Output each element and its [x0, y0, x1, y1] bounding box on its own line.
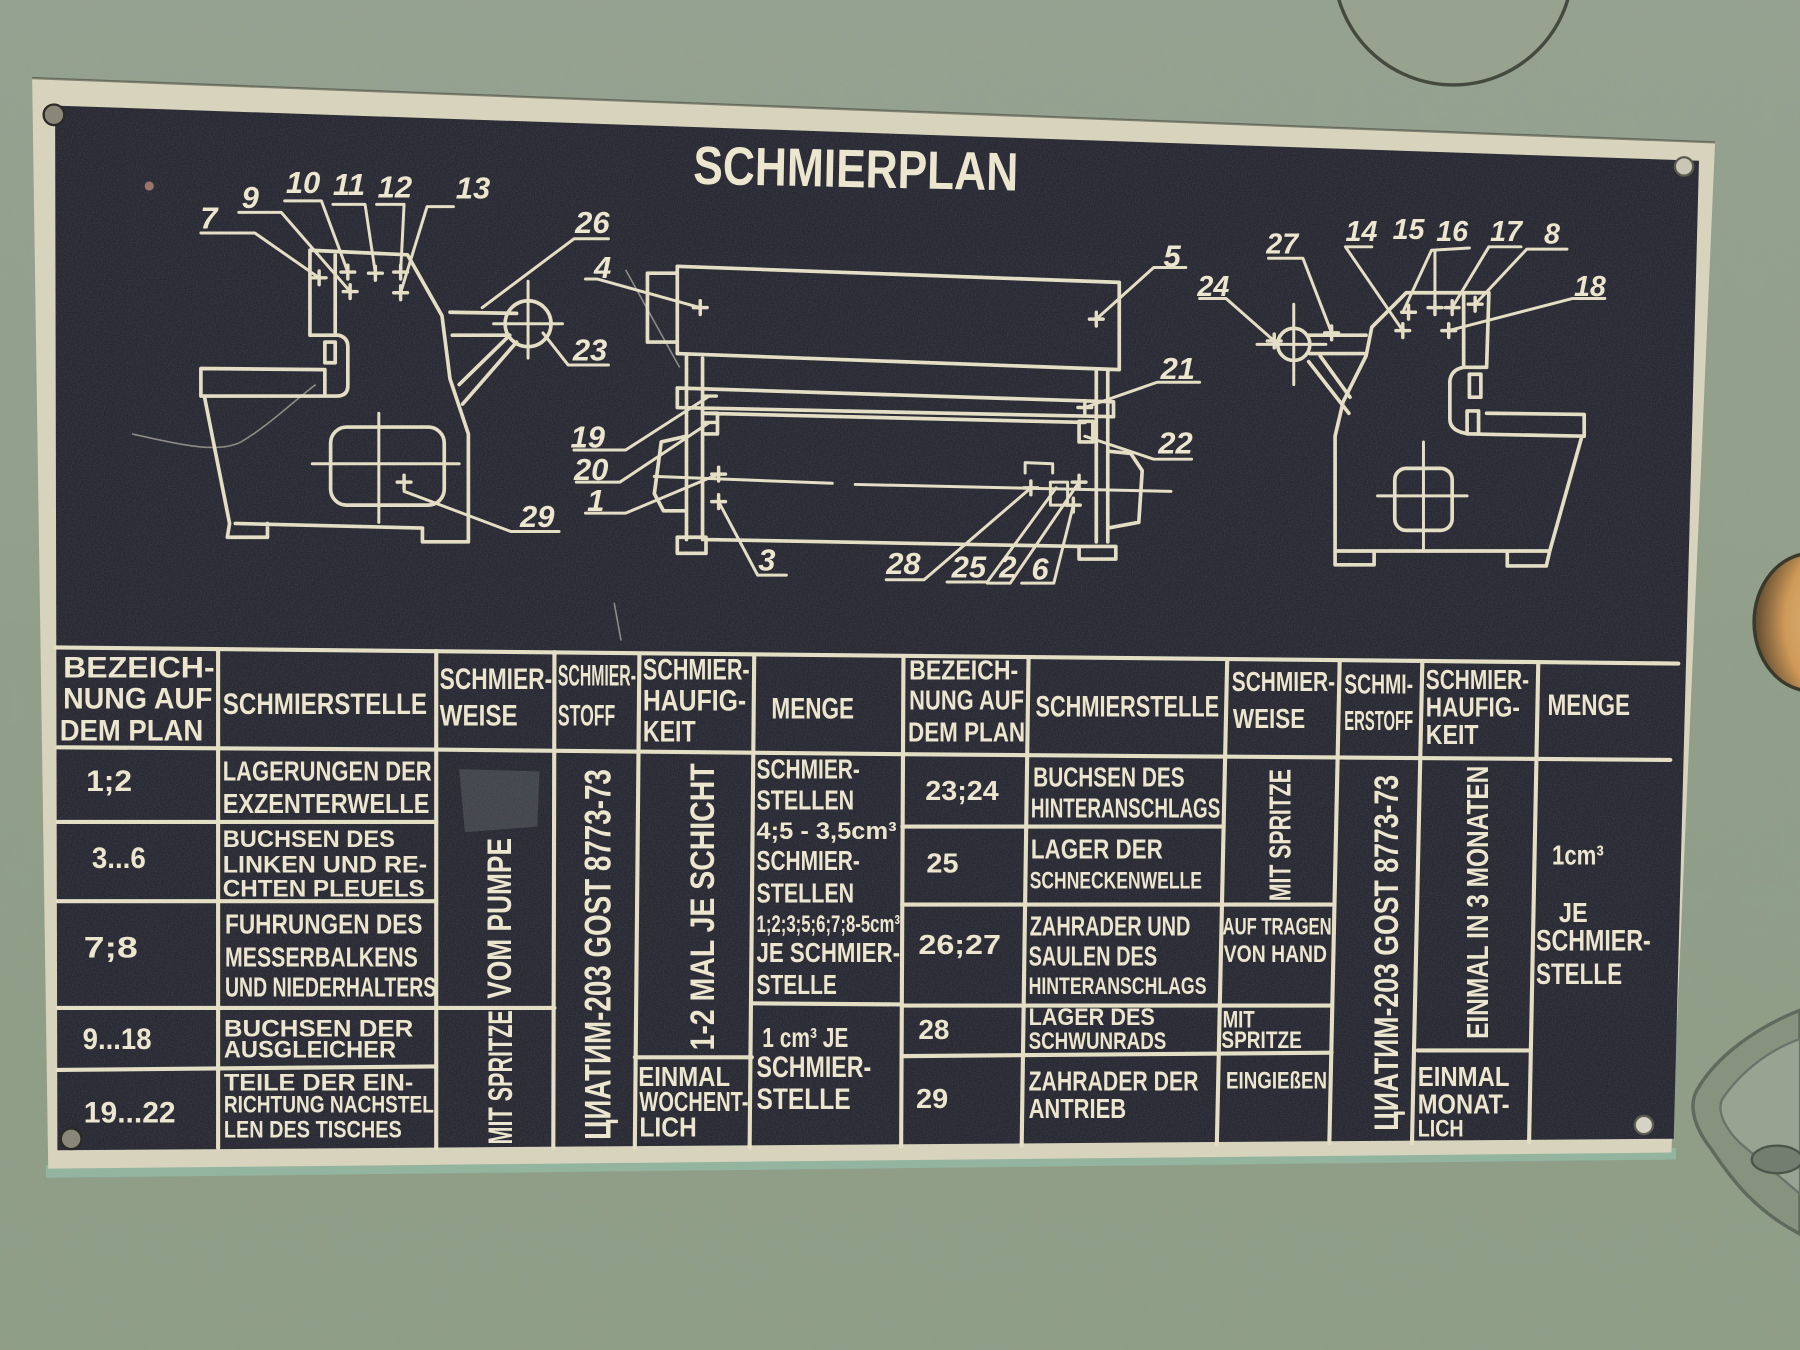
- table body, right half: EINMAL IN 3 MONATEN: [1460, 766, 1495, 1039]
- table header, left half: STOFF: [558, 700, 615, 733]
- table body, left half: JE SCHMIER-: [757, 937, 900, 968]
- panel: dark plate face: [46, 98, 1710, 1159]
- table header, left half: HAUFIG-: [643, 685, 746, 718]
- table body, left half: UND NIEDERHALTERS: [225, 971, 436, 1002]
- table header, right half: SCHMIER-: [1232, 666, 1335, 697]
- table body, left half: 4;5 - 3,5cm³: [757, 818, 897, 845]
- table body, left half: LINKEN UND RE-: [223, 851, 427, 878]
- table body, right half: [916, 761, 1651, 1142]
- table body, left half: 1;2;3;5;6;7;8-5cm³: [757, 911, 900, 938]
- table body, left half: LAGERUNGEN DER: [223, 756, 432, 787]
- point numbers, left view: 13: [456, 171, 490, 206]
- table header, right half: SCHMIERSTELLE: [1035, 690, 1219, 723]
- mint paint edge under plate: [46, 1148, 1676, 1178]
- lubrication leaders, left view: [201, 201, 608, 532]
- diagram: right side view of machine: [1196, 214, 1606, 566]
- point numbers, right view: [1196, 214, 1606, 303]
- table body, right half: 23;24: [925, 775, 999, 806]
- table body, right half: HINTERANSCHLAGS: [1031, 792, 1220, 823]
- table body, left half: 3...6: [92, 842, 146, 875]
- table header, right half: BEZEICH-: [909, 655, 1018, 686]
- table header, right half: DEM PLAN: [908, 717, 1025, 748]
- point numbers, front view: 21: [1160, 351, 1195, 386]
- table body, right half: 29: [916, 1083, 948, 1114]
- table body, left half: MESSERBALKENS: [225, 942, 418, 973]
- table body, right half: ЦИАТИМ-203 GOST 8773-73: [1368, 775, 1406, 1131]
- table body, right half: LICH: [1418, 1115, 1464, 1142]
- table body, left half: STELLE: [757, 969, 837, 1000]
- table body, right half: 25: [926, 847, 959, 878]
- table body, left half: CHTEN PLEUELS: [223, 876, 425, 903]
- table body, right half: SCHWUNRADS: [1029, 1028, 1166, 1055]
- table body, right half: BUCHSEN DES: [1033, 761, 1185, 792]
- table header, left half: SCHMIER-: [643, 654, 750, 687]
- table header, left half: KEIT: [643, 716, 696, 749]
- table header, left half: [60, 651, 854, 749]
- title: SCHMIERPLAN: [693, 136, 1019, 203]
- panel: lubrication table grid: [55, 647, 1678, 1148]
- point numbers, front view: [571, 238, 1195, 587]
- point numbers, right view: 24: [1196, 271, 1229, 303]
- table body, left half: 1;2: [86, 765, 132, 798]
- point numbers, left view: 23: [572, 332, 607, 367]
- table body, right half: MONAT-: [1418, 1089, 1510, 1120]
- table header, right half: WEISE: [1233, 703, 1305, 734]
- table body, right half: LAGER DER: [1031, 834, 1163, 865]
- table body, right half: ZAHRADER DER: [1029, 1066, 1199, 1097]
- table body, right half: AUF TRAGEN: [1223, 913, 1332, 940]
- table body, right half: 28: [918, 1014, 949, 1045]
- point numbers, right view: 17: [1490, 216, 1524, 248]
- point numbers, right view: 16: [1436, 216, 1469, 248]
- table body, right half: 1cm³: [1552, 839, 1604, 870]
- point numbers, front view: 20: [573, 452, 608, 487]
- rivet top left: [44, 104, 64, 125]
- table body, left half: STELLE: [757, 1083, 851, 1116]
- table body, right half: STELLE: [1536, 958, 1622, 991]
- table body, left half: TEILE DER EIN-: [224, 1070, 413, 1097]
- table body, left half: RICHTUNG NACHSTEL: [224, 1091, 434, 1118]
- table body, right half: JE: [1559, 897, 1588, 928]
- table body, left half: STELLEN: [757, 877, 854, 908]
- point numbers, right view: 18: [1574, 271, 1606, 303]
- table body, left half: EXZENTERWELLE: [223, 788, 429, 819]
- table header, left half: NUNG AUF: [63, 682, 212, 715]
- table header, left half: MENGE: [771, 693, 854, 726]
- point numbers, left view: 10: [286, 165, 320, 200]
- table header, left half: SCHMIER-: [558, 659, 636, 692]
- table header, left half: SCHMIERSTELLE: [223, 688, 427, 721]
- point numbers, right view: 27: [1265, 229, 1300, 261]
- table header, right half: [908, 655, 1630, 750]
- table body, left half: SCHMIER-: [757, 845, 860, 876]
- table body, left half: 7;8: [84, 931, 138, 964]
- table body, right half: VON HAND: [1224, 941, 1327, 968]
- panel: metal plate frame: [32, 78, 1715, 1169]
- table body, right half: SPRITZE: [1221, 1027, 1302, 1054]
- table body, left half: MIT SPRITZE: [482, 1010, 520, 1145]
- point numbers, front view: 6: [1031, 552, 1049, 587]
- table body, left half: WOCHENT-: [639, 1086, 748, 1117]
- rivet bottom right: [1635, 1116, 1653, 1134]
- table body, left half: 1-2 MAL JE SCHICHT: [684, 763, 722, 1050]
- table body, right half: SCHMIER-: [1536, 925, 1651, 958]
- rivet bottom left: [61, 1128, 82, 1149]
- table body, left half: FUHRUNGEN DES: [225, 908, 422, 939]
- table body, left half: ЦИАТИМ-203 GOST 8773-73: [578, 769, 619, 1140]
- point numbers, front view: 4: [593, 250, 611, 285]
- diagram: left side view of machine: [200, 165, 610, 542]
- table header, left half: SCHMIER-: [440, 663, 552, 696]
- table header, right half: MENGE: [1547, 689, 1630, 722]
- point numbers, left view: 9: [242, 180, 260, 215]
- table body, left half: 9...18: [83, 1023, 152, 1056]
- point numbers, left view: 11: [333, 167, 365, 202]
- point numbers, left view: 7: [200, 200, 219, 235]
- table body, left half: [83, 753, 900, 1145]
- point numbers, right view: 15: [1393, 214, 1426, 246]
- table body, left half: 19...22: [84, 1097, 176, 1130]
- table header, right half: SCHMI-: [1344, 668, 1413, 699]
- point numbers, front view: 22: [1157, 425, 1193, 460]
- table body, left half: BUCHSEN DES: [223, 826, 395, 853]
- table body, right half: ANTRIEB: [1029, 1093, 1126, 1124]
- table body, left half: BUCHSEN DER: [224, 1016, 413, 1043]
- rivet top right: [1675, 157, 1693, 176]
- point numbers, front view: 2: [998, 549, 1017, 584]
- point numbers, left view: 12: [378, 169, 412, 204]
- table body, right half: SCHNECKENWELLE: [1030, 868, 1202, 895]
- table body, left half: LICH: [639, 1111, 697, 1142]
- hole in housing at right edge: [1754, 553, 1800, 691]
- table body, right half: MIT: [1223, 1006, 1255, 1033]
- point numbers, front view: 25: [951, 549, 987, 584]
- table body, right half: EINMAL: [1418, 1061, 1510, 1092]
- table body, left half: LEN DES TISCHES: [224, 1117, 402, 1144]
- table body, left half: STELLEN: [757, 784, 854, 815]
- table header, left half: BEZEICH-: [63, 651, 215, 684]
- lubrication leaders, front view: [574, 267, 1200, 583]
- table body, left half: VOM PUMPE: [481, 838, 519, 999]
- diagram: front view of machine: [571, 238, 1200, 587]
- table header, left half: WEISE: [440, 700, 518, 733]
- table body, left half: SCHMIER-: [757, 753, 860, 784]
- point numbers, left view: 29: [519, 499, 555, 534]
- table header, right half: NUNG AUF: [909, 684, 1024, 715]
- table body, right half: 26;27: [918, 929, 1001, 960]
- point numbers, right view: 14: [1346, 216, 1377, 248]
- lubrication leaders, right view: [1200, 247, 1605, 348]
- point numbers, front view: 1: [587, 483, 604, 518]
- table body, right half: EINGIEßEN: [1226, 1067, 1327, 1094]
- table body, right half: LAGER DES: [1029, 1004, 1155, 1031]
- table body, right half: ZAHRADER UND: [1030, 911, 1190, 942]
- table body, left half: AUSGLEICHER: [224, 1036, 396, 1063]
- point numbers, left view: 26: [574, 205, 610, 240]
- table body, left half: EINMAL: [638, 1061, 730, 1092]
- point numbers, front view: 3: [758, 543, 775, 578]
- table header, right half: KEIT: [1426, 719, 1479, 750]
- table header, right half: HAUFIG-: [1426, 691, 1520, 722]
- table header, right half: ERSTOFF: [1344, 705, 1413, 736]
- point numbers, right view: 8: [1544, 218, 1560, 250]
- table body, right half: MIT SPRITZE: [1262, 769, 1297, 901]
- table header, left half: DEM PLAN: [60, 714, 203, 747]
- table body, right half: SAULEN DES: [1029, 940, 1157, 971]
- point numbers, front view: 5: [1163, 238, 1181, 273]
- scratches on plate: [132, 181, 680, 832]
- point numbers, front view: 19: [571, 420, 606, 455]
- table header, right half: SCHMIER-: [1426, 664, 1529, 695]
- point numbers, left view: [200, 165, 610, 534]
- metal latch at lower right: [1693, 1010, 1800, 1234]
- circular cover at the top edge: [1334, 0, 1573, 85]
- table body, right half: HINTERANSCHLAGS: [1029, 973, 1207, 1000]
- table body, left half: 1 cm³ JE: [762, 1022, 848, 1053]
- table body, left half: SCHMIER-: [757, 1051, 871, 1084]
- point numbers, front view: 28: [885, 546, 921, 581]
